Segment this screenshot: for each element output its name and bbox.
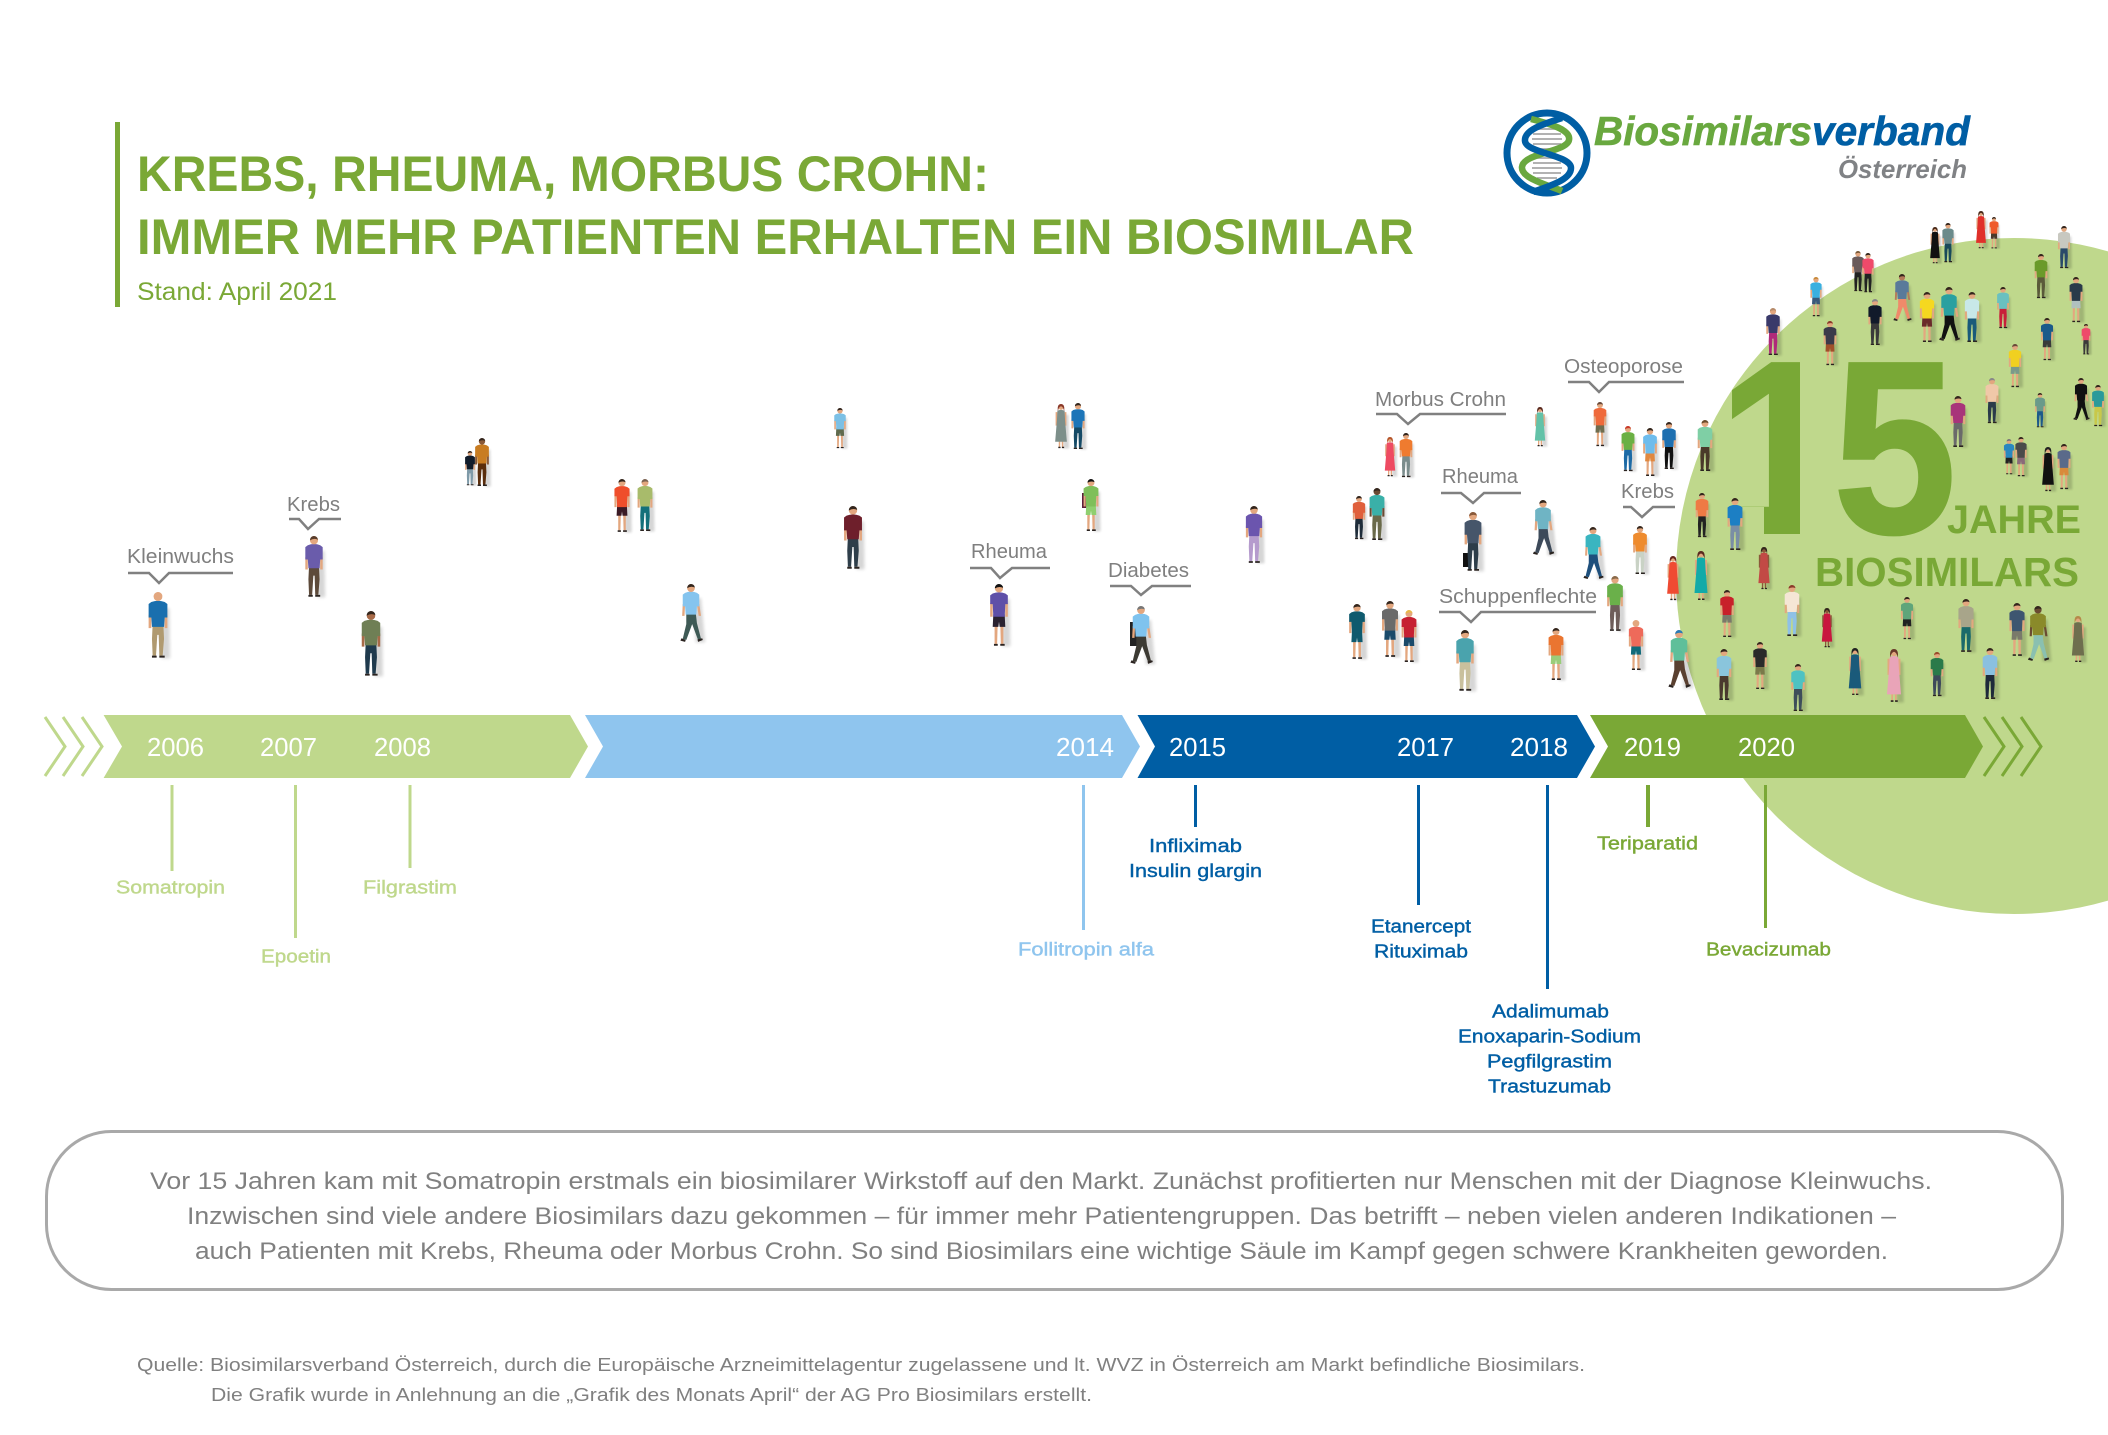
timeline chevrons: left [45, 717, 102, 776]
drug: Adalimumab, Enoxaparin-Sodium, Pegfilgrastim, Trastuzumab: Enoxaparin-Sodium [1458, 1026, 1641, 1046]
panel: summary text box [46, 1132, 2062, 1290]
callout: Krebs 2007: Krebs [287, 494, 340, 516]
drug: Epoetin: Epoetin [261, 946, 331, 966]
timeline segment: 2015-2018 [1138, 715, 1595, 778]
people: middle clusters [1349, 402, 1714, 691]
drug: Adalimumab, Enoxaparin-Sodium, Pegfilgrastim, Trastuzumab [1458, 785, 1641, 1096]
drug: Etanercept, Rituximab: Rituximab [1374, 940, 1468, 962]
year labels: 2008 [374, 732, 431, 762]
callout: Kleinwuchs [127, 546, 234, 583]
drug: Infliximab, Insulin glargin: Insulin glargin [1129, 860, 1262, 881]
year labels [147, 732, 1795, 762]
year labels: 2020 [1738, 732, 1795, 762]
people: left of the timeline [149, 403, 1264, 676]
drug: Adalimumab, Enoxaparin-Sodium, Pegfilgrastim, Trastuzumab: Adalimumab [1492, 1000, 1609, 1022]
callout: Kleinwuchs: Kleinwuchs [127, 546, 234, 568]
year labels: 2019 [1624, 732, 1681, 762]
title line 2: IMMER MEHR PATIENTEN ERHALTEN EIN BIOSIMILAR [137, 209, 1414, 265]
big 15 years heading [1732, 362, 2080, 586]
timeline chevrons: right [1984, 717, 2041, 776]
callout: Morbus Crohn [1375, 389, 1506, 424]
big 15 years heading: JAHRE [1947, 498, 2081, 542]
callout: Schuppenflechte: Schuppenflechte [1439, 586, 1597, 608]
drug: Bevacizumab: Bevacizumab [1706, 938, 1831, 960]
callout: Rheuma 2017 [1441, 466, 1521, 503]
timeline segment: 2006-2008 [104, 715, 588, 778]
source note: Die Grafik wurde in Anlehnung an die „Grafik des Monats April“ der AG Pro Biosimilars erstellt. [211, 1384, 1092, 1405]
callout: Rheuma 2014: Rheuma [971, 541, 1048, 563]
icon: DNA helix in ring [1507, 113, 1587, 193]
drug: Somatropin: Somatropin [116, 876, 225, 898]
logo: Biosimilarsverband Österreich [1507, 108, 1971, 193]
timeline segment: 2009-2014 [585, 715, 1140, 778]
callout: Rheuma 2017: Rheuma [1442, 466, 1519, 488]
callout: Osteoporose: Osteoporose [1564, 356, 1683, 378]
drug: Adalimumab, Enoxaparin-Sodium, Pegfilgrastim, Trastuzumab: Trastuzumab [1488, 1076, 1611, 1096]
callout: Rheuma 2014 [970, 541, 1050, 578]
drug: Infliximab, Insulin glargin [1129, 785, 1262, 881]
callout: Krebs 2019: Krebs [1621, 481, 1674, 503]
big 15 years heading: 15 [1718, 310, 1957, 585]
year labels: 2017 [1397, 732, 1454, 762]
summary line 2: Inzwischen sind viele andere Biosimilars dazu gekommen – für immer mehr Patientengruppen. Das betrifft – neben vielen anderen Indikationen – [187, 1203, 1897, 1230]
year labels: 2006 [147, 732, 204, 762]
year labels: 2007 [260, 732, 317, 762]
callout: Krebs 2019 [1621, 481, 1675, 517]
drug: Adalimumab, Enoxaparin-Sodium, Pegfilgrastim, Trastuzumab: Pegfilgrastim [1487, 1050, 1612, 1072]
callout: Schuppenflechte [1439, 586, 1597, 622]
year labels: 2014 [1056, 732, 1114, 762]
drug: Filgrastim: Filgrastim [363, 876, 457, 898]
drug: Somatropin [116, 785, 225, 898]
callout: Osteoporose [1564, 356, 1684, 392]
year labels: 2018 [1510, 732, 1568, 762]
people: crowd on the green circle [1694, 211, 2106, 712]
drug: Teriparatid: Teriparatid [1597, 832, 1698, 854]
drug: Infliximab, Insulin glargin: Infliximab [1149, 835, 1242, 856]
source note: Quelle: Biosimilarsverband Österreich, durch die Europäische Arzneimittelagentur zugelassene und lt. WVZ in Österreich am Markt befindliche Biosimilars. [137, 1354, 1585, 1375]
summary line 1: Vor 15 Jahren kam mit Somatropin erstmals ein biosimilarer Wirkstoff auf den Markt. Zunächst profitierten nur Menschen mit der Diagnose Kleinwuchs. [150, 1168, 1932, 1195]
drug: Etanercept, Rituximab [1371, 785, 1471, 962]
logo wordmark: Biosimilars [1594, 108, 1812, 154]
logo: Biosimilarsverband Österreich: verband [1812, 108, 1971, 154]
drug: Follitropin alfa: Follitropin alfa [1018, 938, 1155, 960]
logo subtitle: Österreich [1838, 154, 1967, 184]
drug: Filgrastim [363, 785, 457, 898]
callout: Diabetes [1108, 560, 1191, 595]
title accent bar [115, 122, 120, 307]
year labels: 2015 [1169, 732, 1226, 762]
summary line 3: auch Patienten mit Krebs, Rheuma oder Morbus Crohn. So sind Biosimilars eine wichtige Säule im Kampf gegen schwere Krankheiten geworden. [195, 1238, 1888, 1265]
title block [115, 122, 1414, 307]
title line 1: KREBS, RHEUMA, MORBUS CROHN: [137, 146, 989, 202]
drug: Teriparatid [1597, 785, 1698, 854]
green circle background [1676, 238, 2108, 914]
callout: Krebs 2007 [287, 494, 341, 529]
callout: Diabetes: Diabetes [1108, 560, 1189, 582]
drug: Etanercept, Rituximab: Etanercept [1371, 916, 1471, 936]
timeline segment: 2019-2020 [1590, 715, 1983, 778]
date: Stand: April 2021 [137, 278, 337, 306]
big 15 years heading: BIOSIMILARS [1815, 549, 2079, 595]
source note [137, 1354, 1585, 1405]
callout: Morbus Crohn: Morbus Crohn [1375, 389, 1506, 411]
